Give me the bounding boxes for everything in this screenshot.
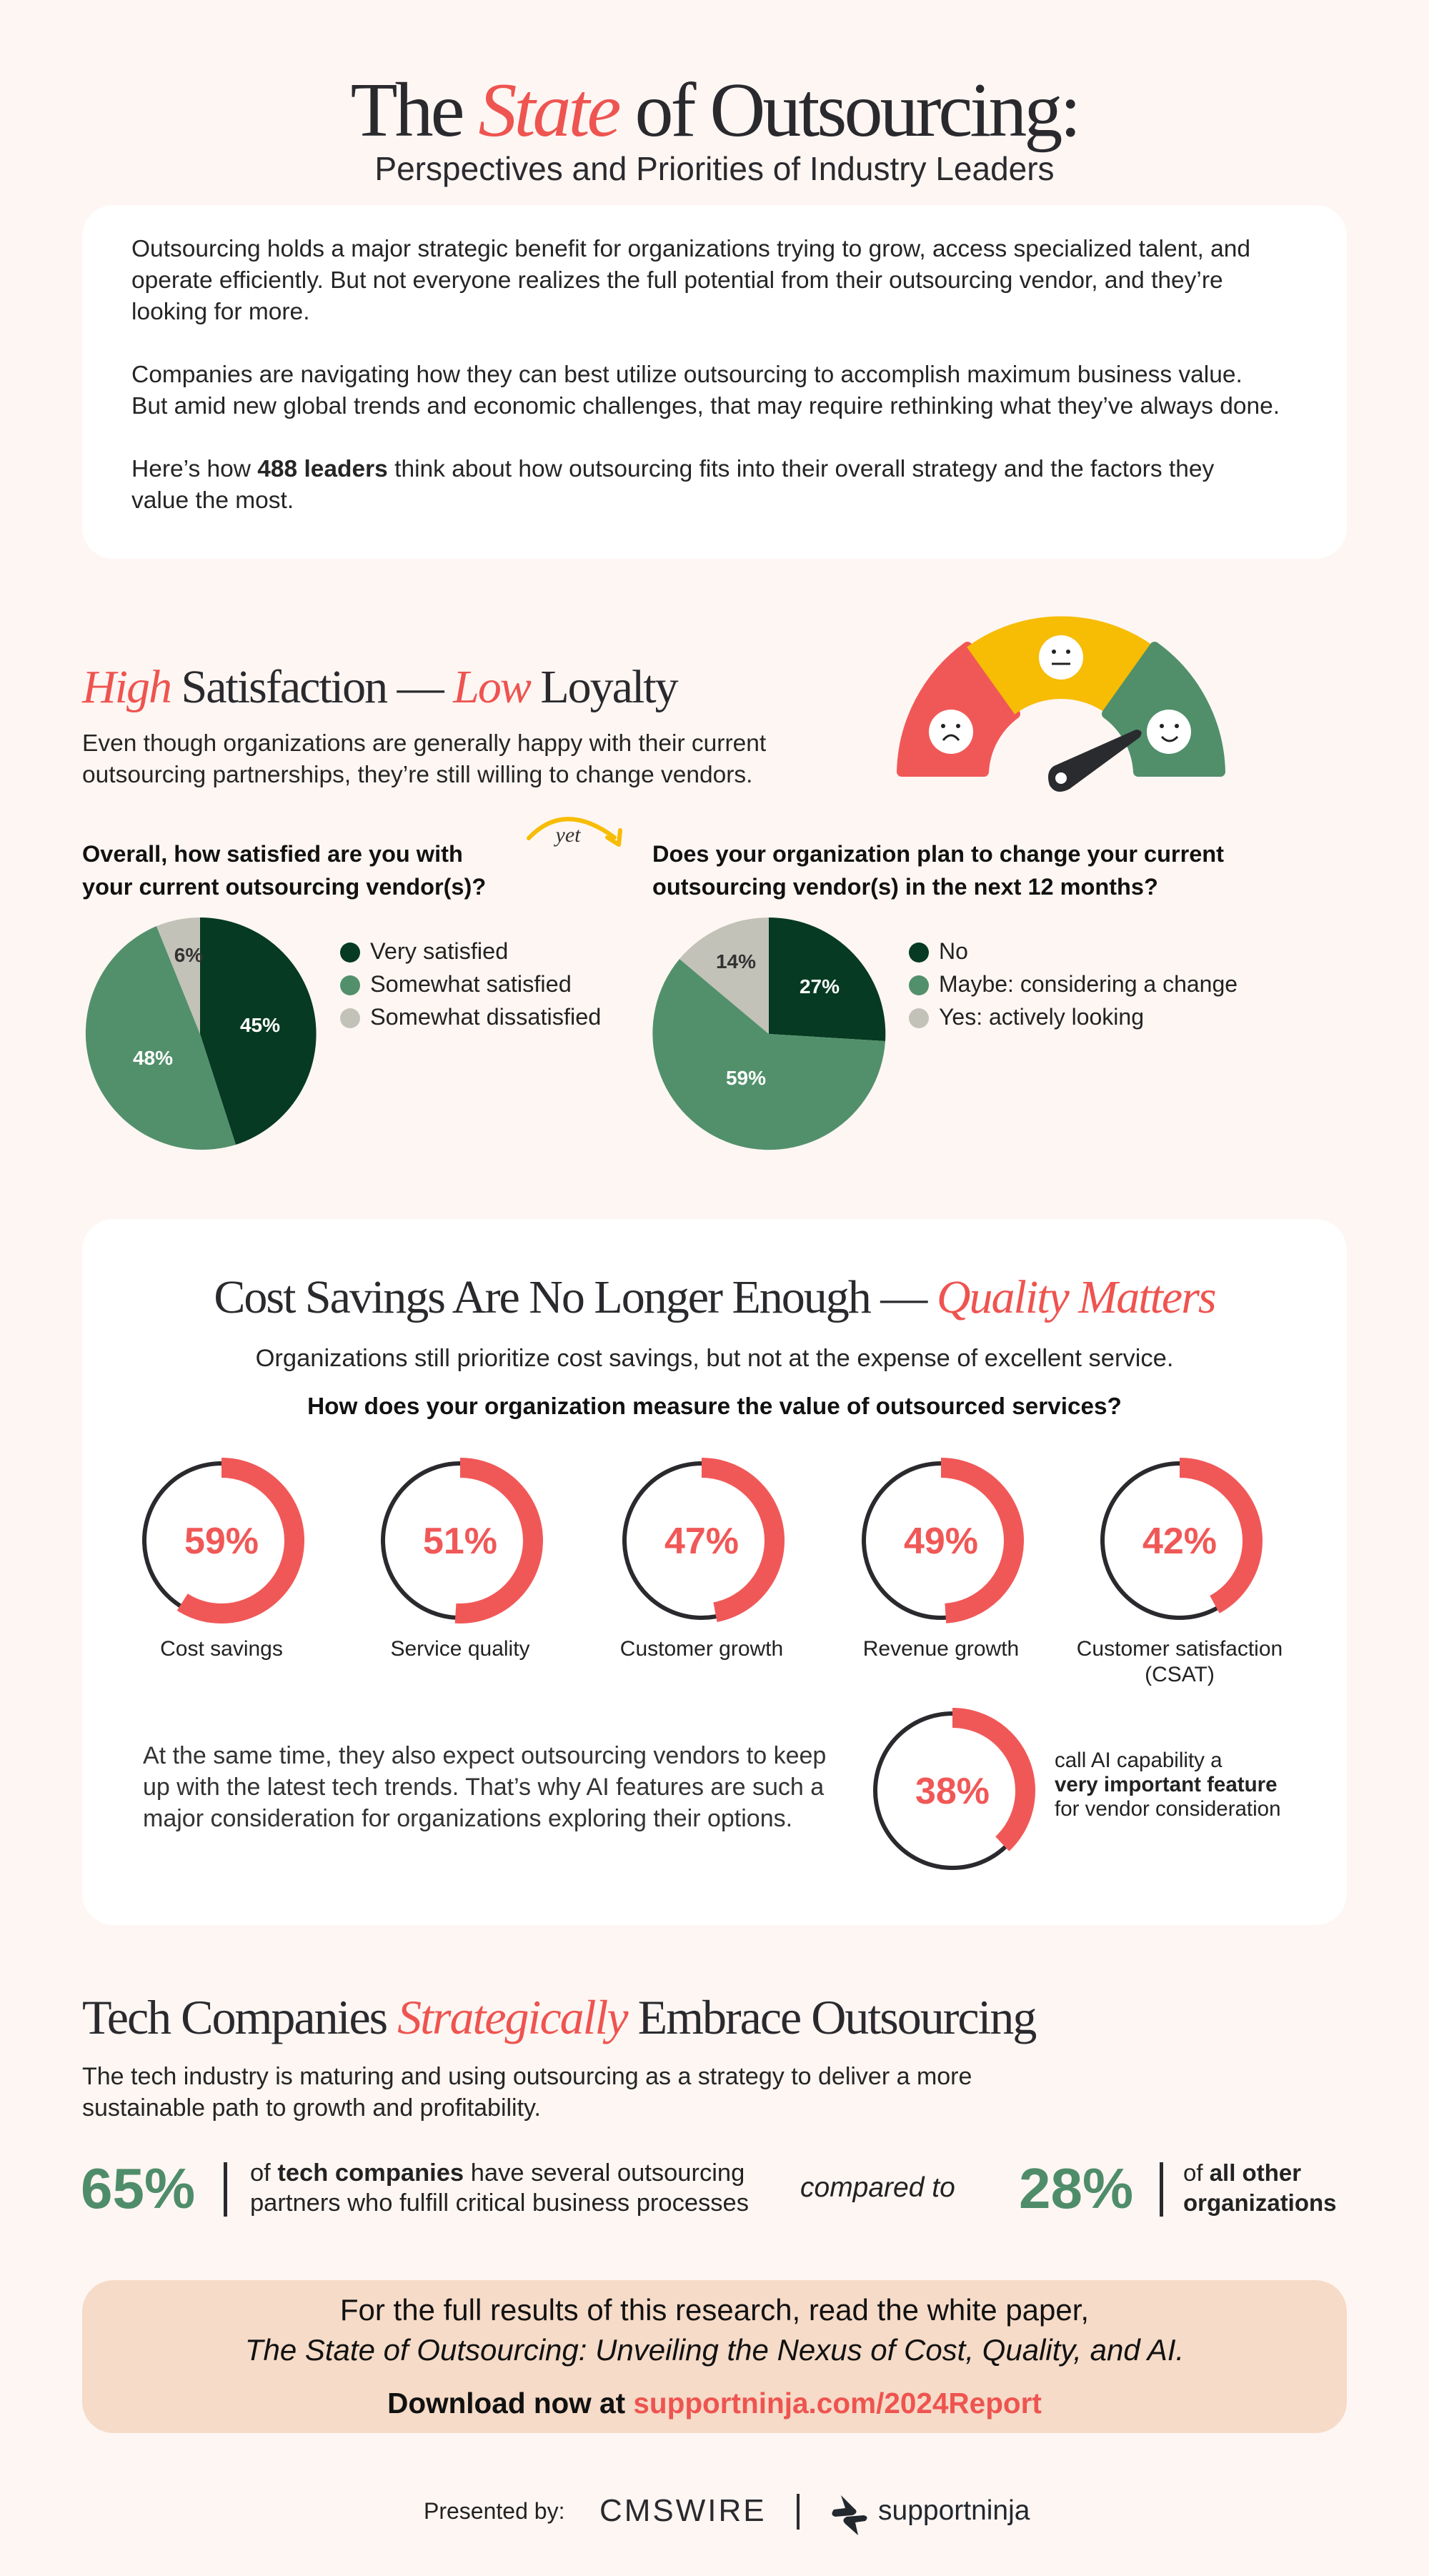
subtitle: Perspectives and Priorities of Industry Leaders: [374, 150, 1055, 187]
footer: presented by: supportninja: [878, 2495, 1030, 2526]
text: CTA: [245, 2293, 1184, 2367]
text block: intro: [131, 236, 1280, 514]
ring chart: cost savings 59%: 59%: [184, 1521, 259, 1562]
label: service quality: Service quality: [390, 1637, 530, 1661]
stat: 65% tech companies: of tech companies have several outsourcing: [250, 2159, 745, 2187]
label: customer growth: Customer growth: [620, 1637, 783, 1661]
callout: AI capability: [1055, 1749, 1280, 1821]
legend: satisfaction: Very satisfied: [370, 938, 508, 964]
label: CSAT: (CSAT): [1145, 1663, 1215, 1686]
stat: 65% tech companies: partners who fulfill critical business processes: [250, 2189, 749, 2217]
panel: call to action: [82, 2280, 1347, 2433]
text block: AI trends: At the same time, they also expect outsourcing vendors to keep: [143, 1742, 826, 1769]
text block: AI trends: [143, 1742, 826, 1832]
ring chart: revenue growth 49%: [862, 1458, 1024, 1623]
callout: AI capability: call AI capability a: [1055, 1749, 1222, 1772]
stat: 28% all other: 28%: [1019, 2157, 1133, 2220]
text: CTA: The State of Outsourcing: Unveiling the Nexus of Cost, Quality, and AI.: [245, 2333, 1184, 2367]
heading: cost savings: Cost Savings Are No Longer Enough — Quality Matters: [214, 1271, 1215, 1323]
stat: 65% tech companies: 65%: [81, 2157, 195, 2220]
label: revenue growth: Revenue growth: [863, 1637, 1019, 1661]
legend: change vendor: Yes: actively looking: [939, 1004, 1144, 1030]
text: tech subtext: The tech industry is maturing and using outsourcing as a strategy to deliver a more: [82, 2063, 972, 2090]
question: satisfaction: Overall, how satisfied are you with: [82, 841, 463, 867]
question: change vendor: [652, 841, 1224, 900]
footer: presented by: Presented by:: [424, 2498, 564, 2524]
ring chart: CSAT 42%: [1100, 1458, 1263, 1620]
ring chart: cost savings 59%: [142, 1458, 304, 1623]
text block: intro: Outsourcing holds a major strategic benefit for organizations trying to grow, access specialized talent, and: [131, 236, 1250, 262]
ring chart: AI 38%: 38%: [915, 1771, 990, 1812]
footer: presented by: [424, 2493, 1030, 2535]
ring chart: service quality 51%: [381, 1458, 543, 1623]
stat: 65% tech companies: [81, 2157, 749, 2220]
arrow: yet: [527, 817, 622, 847]
ring chart: service quality 51%: 51%: [423, 1521, 497, 1562]
text block: intro: looking for more.: [131, 299, 310, 325]
text block: intro: Here’s how 488 leaders think about how outsourcing fits into their overall strategy and the factors they: [131, 456, 1214, 482]
needle: [1048, 730, 1142, 792]
legend: change vendor: No: [939, 938, 968, 964]
arrow: yet: yet: [554, 823, 581, 847]
question: change vendor: Does your organization plan to change your current: [652, 841, 1224, 867]
pie chart: change vendor: 27%: [800, 975, 840, 998]
pie chart: satisfaction: 45%: [240, 1014, 280, 1036]
panel: intro: [82, 205, 1347, 559]
pie chart: change vendor: 59%: [726, 1067, 766, 1089]
logo: CMSWIRE: CMSWIRE: [599, 2493, 767, 2528]
question: satisfaction: your current outsourcing vendor(s)?: [82, 874, 486, 900]
ring chart: revenue growth 49%: 49%: [904, 1521, 978, 1562]
text: tech subtext: [82, 2063, 972, 2122]
text: satisfaction subtext: outsourcing partnerships, they’re still willing to change vendors.: [82, 762, 753, 788]
text block: intro: Companies are navigating how they can best utilize outsourcing to accomplish maximum business value.: [131, 362, 1243, 388]
question: change vendor: outsourcing vendor(s) in the next 12 months?: [652, 874, 1158, 900]
label: cost savings: Cost savings: [160, 1637, 283, 1661]
legend: satisfaction: [340, 938, 601, 1030]
legend: satisfaction: Somewhat dissatisfied: [370, 1004, 601, 1030]
pie chart: change vendor: [652, 917, 886, 1150]
stat: 28% all other: [1019, 2157, 1337, 2220]
pie chart: satisfaction: 48%: [133, 1047, 173, 1069]
ring chart: customer growth 47%: [622, 1458, 785, 1622]
text: satisfaction subtext: [82, 730, 766, 788]
label: CSAT: Customer satisfaction: [1077, 1637, 1283, 1661]
pie chart: change vendor: 14%: [716, 950, 756, 973]
text block: AI trends: up with the latest tech trends. That’s why AI features are such a: [143, 1774, 824, 1801]
text: tech subtext: sustainable path to growth and profitability.: [82, 2094, 541, 2122]
faces: [929, 710, 973, 754]
subtext: Organizations still prioritize cost savings, but not at the expense of excellent service.: [256, 1345, 1173, 1372]
panel: cost savings quality: [82, 1219, 1347, 1925]
logo: supportninja: [832, 2495, 867, 2535]
text: satisfaction subtext: Even though organizations are generally happy with their current: [82, 730, 766, 757]
text block: intro: operate efficiently. But not everyone realizes the full potential from their outsourcing vendor, and they’re: [131, 267, 1223, 294]
pie chart: satisfaction: 6%: [174, 944, 203, 966]
title: The State of Outsourcing:: [351, 68, 1078, 153]
ring chart: AI 38%: [873, 1708, 1035, 1870]
text: compared to: compared to: [800, 2172, 955, 2203]
text block: intro: But amid new global trends and economic challenges, that may require rethinking what they’ve always done.: [131, 393, 1280, 419]
heading: tech companies: Tech Companies Strategically Embrace Outsourcing: [82, 1990, 1035, 2044]
question: satisfaction: [82, 841, 486, 900]
callout: AI capability: for vendor consideration: [1055, 1797, 1280, 1821]
heading: high satisfaction low loyalty: High Satisfaction — Low Loyalty: [82, 661, 677, 713]
ring chart: customer growth 47%: 47%: [664, 1521, 739, 1562]
stat: 28% all other: organizations: [1183, 2189, 1337, 2216]
stat: 28% all other: of all other: [1183, 2159, 1301, 2186]
legend: change vendor: [909, 938, 1238, 1030]
label: CSAT: [1077, 1637, 1283, 1686]
text block: AI trends: major consideration for organizations exploring their options.: [143, 1805, 792, 1832]
question: measure value: How does your organization measure the value of outsourced services?: [307, 1393, 1122, 1420]
text: CTA: For the full results of this research, read the white paper,: [340, 2293, 1089, 2327]
pie chart: satisfaction: [86, 917, 317, 1150]
callout: AI capability: very important feature: [1055, 1773, 1277, 1796]
ring chart: CSAT 42%: 42%: [1142, 1521, 1217, 1562]
text block: intro: value the most.: [131, 487, 294, 514]
legend: change vendor: Maybe: considering a change: [939, 971, 1238, 997]
legend: satisfaction: Somewhat satisfied: [370, 971, 572, 997]
text: download link: Download now at supportninja.com/2024Report: [387, 2387, 1042, 2420]
icon: gauge: [897, 616, 1225, 792]
